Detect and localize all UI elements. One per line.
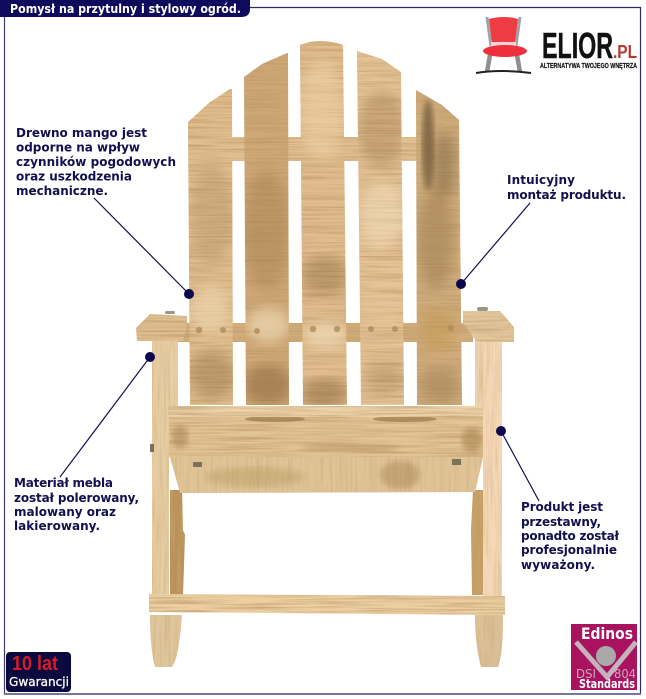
seat underside shading and brackets [150, 444, 461, 489]
text block: profesjonalnie [521, 543, 617, 557]
badge number: 10 lat [12, 653, 58, 675]
rockers [150, 490, 503, 667]
text block: wyważony. [521, 558, 595, 572]
slat stains [188, 60, 460, 406]
armrests with bolts [136, 311, 514, 342]
text block: został polerowany, [14, 491, 139, 505]
front legs [152, 338, 502, 596]
emblem [576, 642, 636, 677]
text block: mechaniczne. [16, 184, 108, 198]
text block: malowany oraz [14, 505, 116, 519]
standard number [576, 667, 636, 681]
header banner: Pomysł na przytulny i stylowy ogród. [10, 2, 241, 16]
text block: montaż produktu. [507, 188, 626, 202]
pointer line and dot [94, 198, 194, 299]
standard number: DSI [576, 667, 596, 681]
brand name: Edinos [581, 624, 633, 643]
pointer line and dot [496, 426, 539, 501]
icon: red chair [476, 17, 531, 73]
text block: oraz uszkodzenia [16, 170, 132, 184]
chair back rails [177, 137, 473, 342]
logo: Elior.pl [476, 17, 637, 73]
callout: material finish [14, 352, 155, 533]
illustration: wooden rocking chair [136, 41, 514, 667]
seat board stains [172, 416, 482, 453]
rail dowels [196, 325, 454, 334]
badge: Edinos DSI 804 Standards [571, 624, 637, 691]
seat underside [170, 457, 483, 493]
callout: mango wood [16, 126, 194, 299]
callout: adjustable product [496, 426, 620, 572]
text block: Materiał mebla [14, 476, 113, 490]
seat front board [168, 406, 483, 457]
text block: Drewno mango jest [16, 126, 147, 140]
text block: odporne na wpływ [16, 140, 140, 154]
text block: czynników pogodowych [16, 155, 176, 169]
text block: Produkt jest [521, 500, 603, 514]
domain suffix: .PL [613, 42, 637, 62]
pointer line and dot [60, 352, 155, 477]
text block: lakierowany. [14, 519, 100, 533]
text block: ponadto został [521, 529, 620, 543]
badge label: Gwarancji [9, 674, 69, 689]
chair back slats [188, 41, 462, 405]
text block: Intuicyjny [507, 173, 575, 187]
callout: assembly [456, 173, 626, 289]
foot rail [149, 594, 505, 615]
text block: przestawny, [521, 515, 601, 529]
pointer line and dot [456, 203, 530, 289]
badge: 10 year warranty [6, 652, 71, 692]
standard number: 804 [614, 667, 636, 681]
